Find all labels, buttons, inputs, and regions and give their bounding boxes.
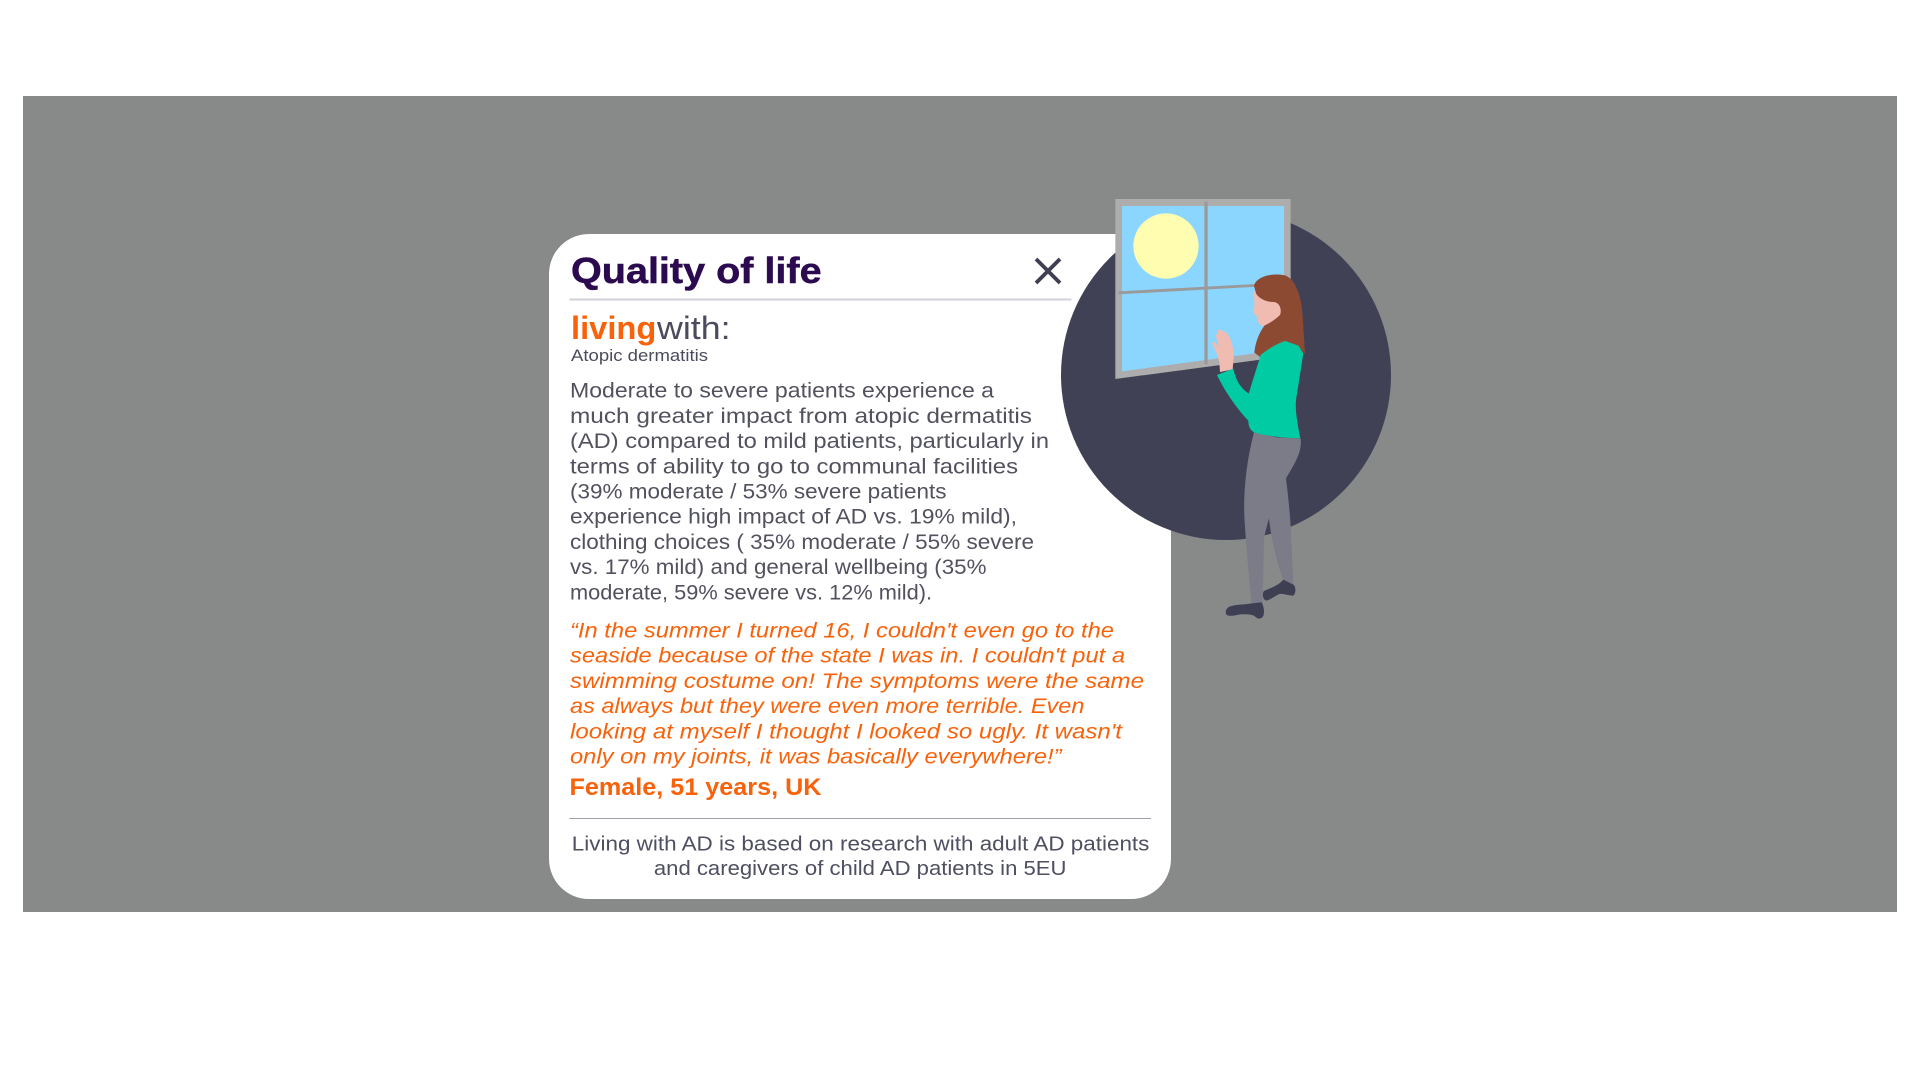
quote attribution: Female, 51 years, UK [570,774,822,801]
footer divider [569,818,1151,819]
text block: patient quote: as always but they were even more terrible. Even [570,695,1084,718]
text block: patient quote: swimming costume on! The symptoms were the same [570,670,1144,693]
raised hand [1212,330,1234,372]
right foot [1263,580,1295,601]
footer note: and caregivers of child AD patients in 5EU [654,857,1066,880]
icon: close cross [1036,259,1060,283]
footer note [572,833,1149,880]
text block: body paragraph: moderate, 59% severe vs. 12% mild). [570,581,932,604]
text block: body paragraph: (39% moderate / 53% severe patients [570,480,946,504]
brand word: living: living [571,310,656,346]
green sweater [1217,341,1303,438]
subheading: atopic dermatitis: Atopic dermatitis [571,346,708,365]
window frame [1115,199,1291,379]
window glass [1122,206,1284,371]
face [1253,290,1281,326]
text block: body paragraph: much greater impact from atopic dermatitis [570,405,1032,428]
text block: patient quote: “In the summer I turned 16, I couldn't even go to the [570,620,1114,642]
hair [1254,275,1305,357]
card background [549,234,1171,899]
text block: body paragraph [570,380,1049,604]
sun [1133,213,1199,279]
brand heading: livingwith [571,310,730,346]
trousers [1244,432,1301,604]
window [1115,199,1291,379]
panel: white quality of life card [549,234,1171,899]
text block: body paragraph: vs. 17% mild) and general wellbeing (35% [570,556,986,579]
woman figure [1212,275,1305,619]
window glazing bars [1118,202,1263,364]
text block: patient quote: only on my joints, it was basically everywhere!” [570,746,1063,768]
left foot [1226,602,1264,619]
footer note: Living with AD is based on research with adult AD patients [572,833,1149,856]
dark backdrop circle [1061,210,1391,540]
text block: body paragraph: (AD) compared to mild patients, particularly in [570,430,1049,453]
grey background band [23,96,1897,912]
brand word: with: with: [656,310,730,346]
text block: body paragraph: experience high impact of AD vs. 19% mild), [570,506,1017,529]
heading: quality of life: Quality of life [571,250,822,291]
text block: patient quote: seaside because of the state I was in. I couldn't put a [570,645,1125,668]
text block: body paragraph: terms of ability to go to communal facilities [570,455,1018,478]
illustration: woman at window [1061,199,1391,619]
text block: patient quote: looking at myself I thought I looked so ugly. It wasn't [570,720,1123,743]
text block: body paragraph: Moderate to severe patients experience a [570,380,994,403]
text block: patient quote [570,620,1144,768]
text block: body paragraph: clothing choices ( 35% moderate / 55% severe [570,531,1034,554]
heading divider [569,298,1071,300]
